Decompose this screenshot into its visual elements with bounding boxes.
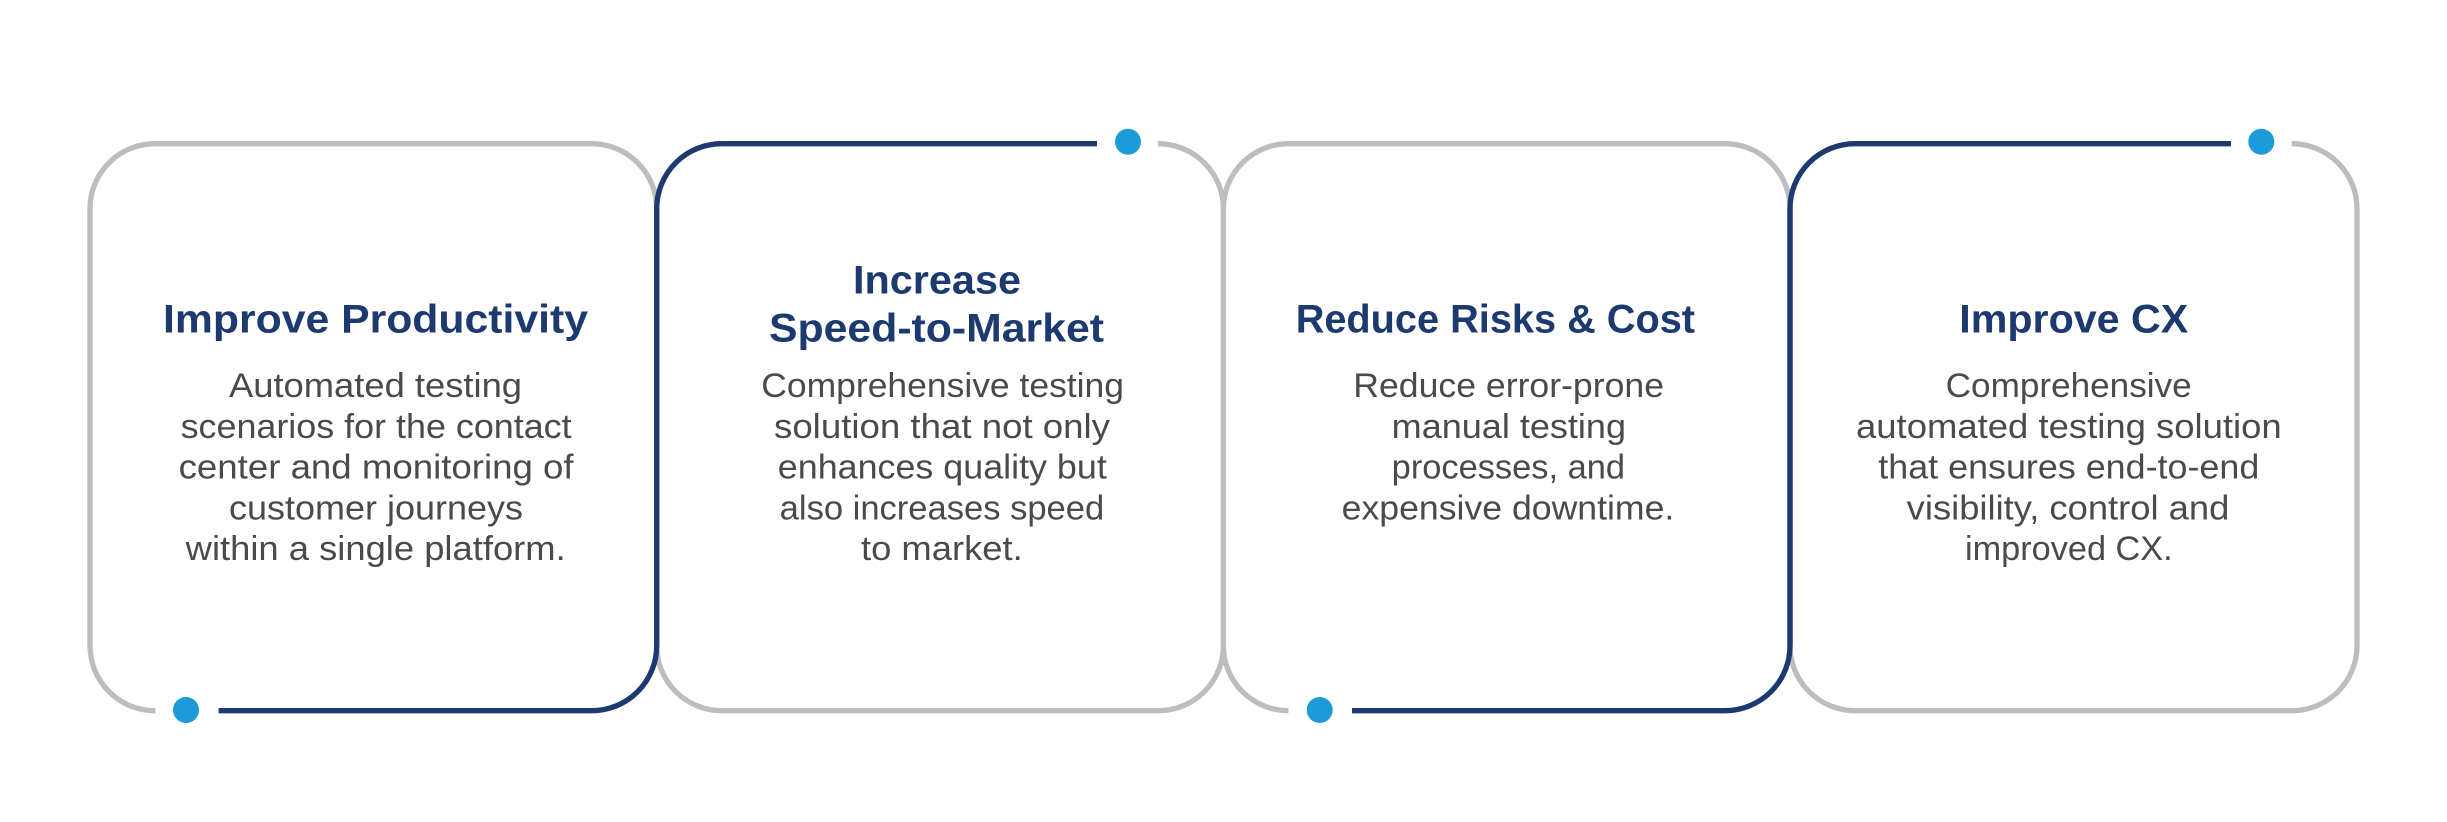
heading: Improve CX — [1959, 298, 2189, 342]
panel: increase speed-to-market — [657, 129, 1141, 646]
body text: within a single platform. — [185, 530, 566, 568]
body text: also increases speed — [780, 489, 1104, 527]
accent line — [1790, 144, 2231, 646]
accent line — [657, 144, 1097, 646]
icon: blue dot — [1307, 697, 1333, 723]
body text: solution that not only — [774, 408, 1110, 446]
body text: to market. — [861, 530, 1023, 568]
accent line — [219, 209, 657, 711]
icon: blue dot — [173, 697, 199, 723]
heading — [769, 258, 1104, 351]
body text: that ensures end-to-end — [1878, 449, 2259, 487]
body text: Reduce error-prone — [1353, 367, 1664, 405]
panel: improve productivity — [163, 209, 657, 723]
heading: Improve Productivity — [163, 298, 589, 342]
body text: customer journeys — [229, 489, 523, 527]
body text — [1342, 367, 1674, 527]
body text: expensive downtime. — [1342, 489, 1674, 527]
accent line — [1352, 209, 1790, 711]
panel: reduce risks and cost — [1296, 209, 1790, 723]
body text — [1856, 367, 2282, 568]
heading: Speed-to-Market — [769, 307, 1104, 351]
body text: scenarios for the contact — [181, 408, 572, 446]
body text: Comprehensive testing — [761, 367, 1124, 405]
icon: blue dot — [1115, 129, 1141, 155]
body text: manual testing — [1392, 408, 1626, 446]
heading: Increase — [853, 258, 1021, 302]
body text: Comprehensive — [1946, 367, 2192, 405]
body text: automated testing solution — [1856, 408, 2282, 446]
body text: improved CX. — [1965, 530, 2173, 568]
panel: improve cx — [1790, 129, 2282, 646]
body text: center and monitoring of — [179, 449, 574, 487]
body text — [761, 367, 1124, 568]
body text: Automated testing — [229, 367, 522, 405]
body text: visibility, control and — [1907, 489, 2229, 527]
body text: enhances quality but — [778, 449, 1107, 487]
icon: blue dot — [2248, 129, 2274, 155]
grey card outlines — [90, 144, 2357, 711]
body text: processes, and — [1392, 449, 1625, 487]
body text — [179, 367, 574, 568]
heading: Reduce Risks & Cost — [1296, 298, 1695, 342]
